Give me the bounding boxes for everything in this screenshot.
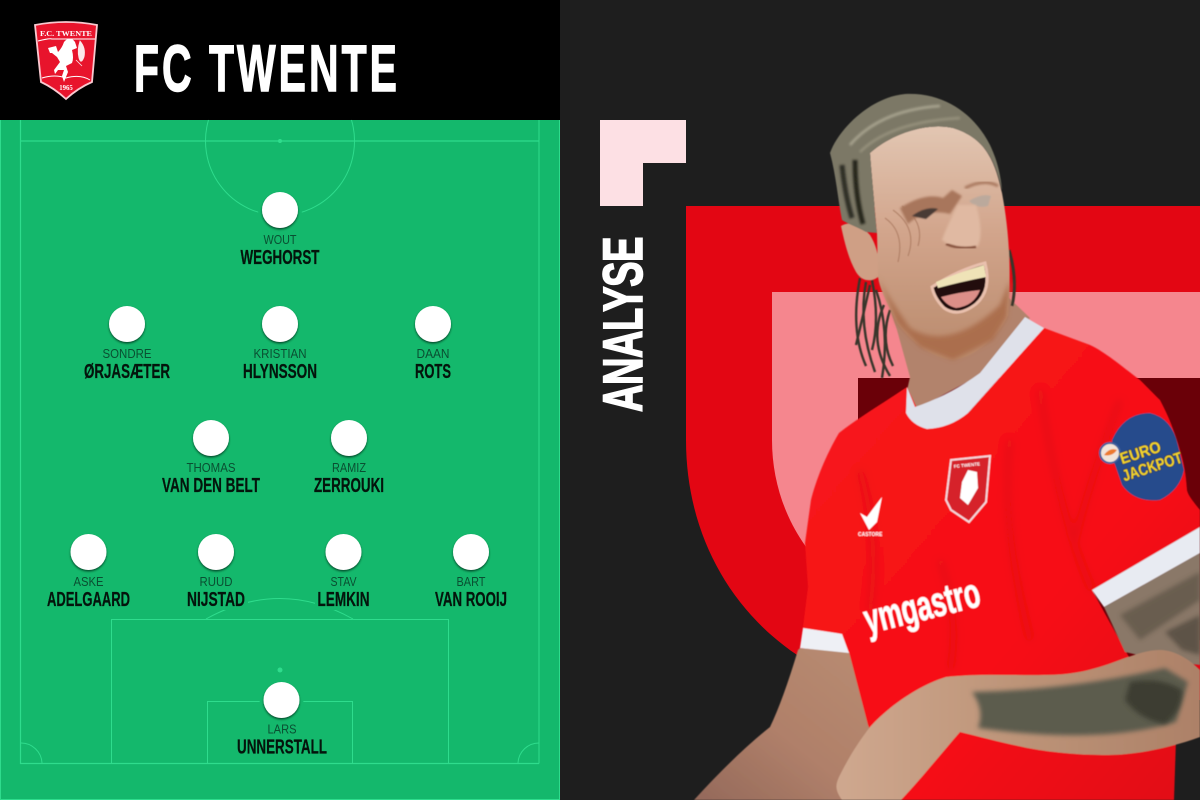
shirt folds	[860, 390, 1120, 670]
shirt sponsor: ymgastro	[859, 569, 985, 643]
player: Wout Weghorst: WOUT	[264, 233, 297, 247]
player: Stav Lemkin	[315, 534, 372, 611]
shirt crest: FC TWENTE	[954, 461, 980, 469]
header bar	[0, 0, 560, 120]
player: Stav Lemkin: LEMKIN	[318, 588, 370, 611]
player: Lars Unnerstall: UNNERSTALL	[237, 736, 327, 758]
player: Lars Unnerstall: LARS	[268, 722, 296, 736]
shirt body	[800, 328, 1200, 800]
player: Kristian Hlynsson: HLYNSSON	[243, 360, 317, 383]
patch wordmark: EURO	[1118, 439, 1163, 468]
player: Daan Rots	[415, 306, 451, 383]
player: Sondre Orjasaeter: ØRJASÆTER	[84, 360, 170, 383]
nose	[942, 205, 981, 248]
player: Kristian Hlynsson: KRISTIAN	[254, 347, 306, 361]
player: Bart van Rooij: BART	[456, 575, 486, 589]
left sleeve cuff	[800, 628, 849, 653]
player: Ruud Nijstad: NIJSTAD	[187, 588, 245, 611]
sleeve patch	[1100, 413, 1185, 500]
player: Lars Unnerstall	[237, 678, 327, 758]
mouth	[932, 263, 987, 312]
vertical label: Analyse: ANALYSE	[593, 237, 655, 412]
player: Thomas van den Belt	[162, 420, 260, 497]
nostril shadow	[946, 244, 976, 248]
left arm	[694, 648, 885, 800]
club crest: 1965	[59, 85, 73, 92]
right sleeve cuff	[1092, 527, 1200, 607]
shirt maker logo	[858, 497, 883, 538]
shirt crest	[946, 456, 990, 522]
player: Ramiz Zerrouki	[314, 420, 384, 497]
player: Ruud Nijstad	[184, 534, 248, 611]
player: Sondre Orjasaeter	[84, 306, 170, 383]
player: Stav Lemkin: STAV	[330, 575, 357, 589]
beard	[878, 277, 1010, 360]
club crest	[35, 22, 97, 99]
pitch lines	[0, 120, 560, 800]
player photo illustration	[694, 94, 1200, 800]
player: Aske Adelgaard: ADELGAARD	[47, 588, 130, 611]
patch wordmark: JACKPOT	[1120, 450, 1185, 485]
player: Daan Rots: ROTS	[415, 360, 451, 383]
pink background shape	[772, 292, 1200, 620]
player: Thomas van den Belt: VAN DEN BELT	[162, 474, 260, 497]
patch wordmark	[1115, 434, 1185, 485]
face	[870, 127, 1010, 360]
right side hair	[1009, 250, 1014, 306]
tattooed upper arm	[1104, 553, 1200, 665]
player: Wout Weghorst: WEGHORST	[240, 246, 320, 269]
neck	[880, 280, 1030, 410]
player: Bart van Rooij	[435, 534, 507, 611]
dark red background shape	[858, 378, 1200, 660]
hanging hair	[856, 278, 893, 378]
player: Daan Rots: DAAN	[416, 347, 450, 361]
player: Ramiz Zerrouki: RAMIZ	[332, 461, 366, 475]
player: Sondre Orjasaeter: SONDRE	[102, 347, 152, 361]
player: Aske Adelgaard: ASKE	[74, 575, 104, 589]
hair detail	[842, 106, 960, 224]
tattoos	[972, 572, 1200, 735]
player: Ramiz Zerrouki: ZERROUKI	[314, 474, 384, 497]
club crest: F.C. TWENTE	[40, 29, 92, 38]
title: FC TWENTE	[134, 31, 397, 105]
shirt maker logo: CASTORE	[858, 532, 883, 538]
player: Ruud Nijstad: RUUD	[200, 575, 232, 589]
red background shape	[686, 206, 1200, 700]
player: Aske Adelgaard	[47, 534, 130, 611]
player: Thomas van den Belt: THOMAS	[186, 461, 236, 475]
pale corner block	[600, 120, 686, 206]
collar	[906, 317, 1044, 429]
ear	[841, 224, 879, 280]
pitch	[0, 120, 560, 800]
player: Bart van Rooij: VAN ROOIJ	[435, 588, 507, 611]
forearm and hand	[836, 650, 1200, 800]
right background panel	[560, 0, 1200, 800]
player: Kristian Hlynsson	[243, 306, 317, 383]
brows and eyes	[900, 182, 998, 224]
player: Wout Weghorst	[240, 188, 320, 269]
cheek wrinkles	[885, 206, 920, 262]
hair	[830, 94, 1002, 233]
